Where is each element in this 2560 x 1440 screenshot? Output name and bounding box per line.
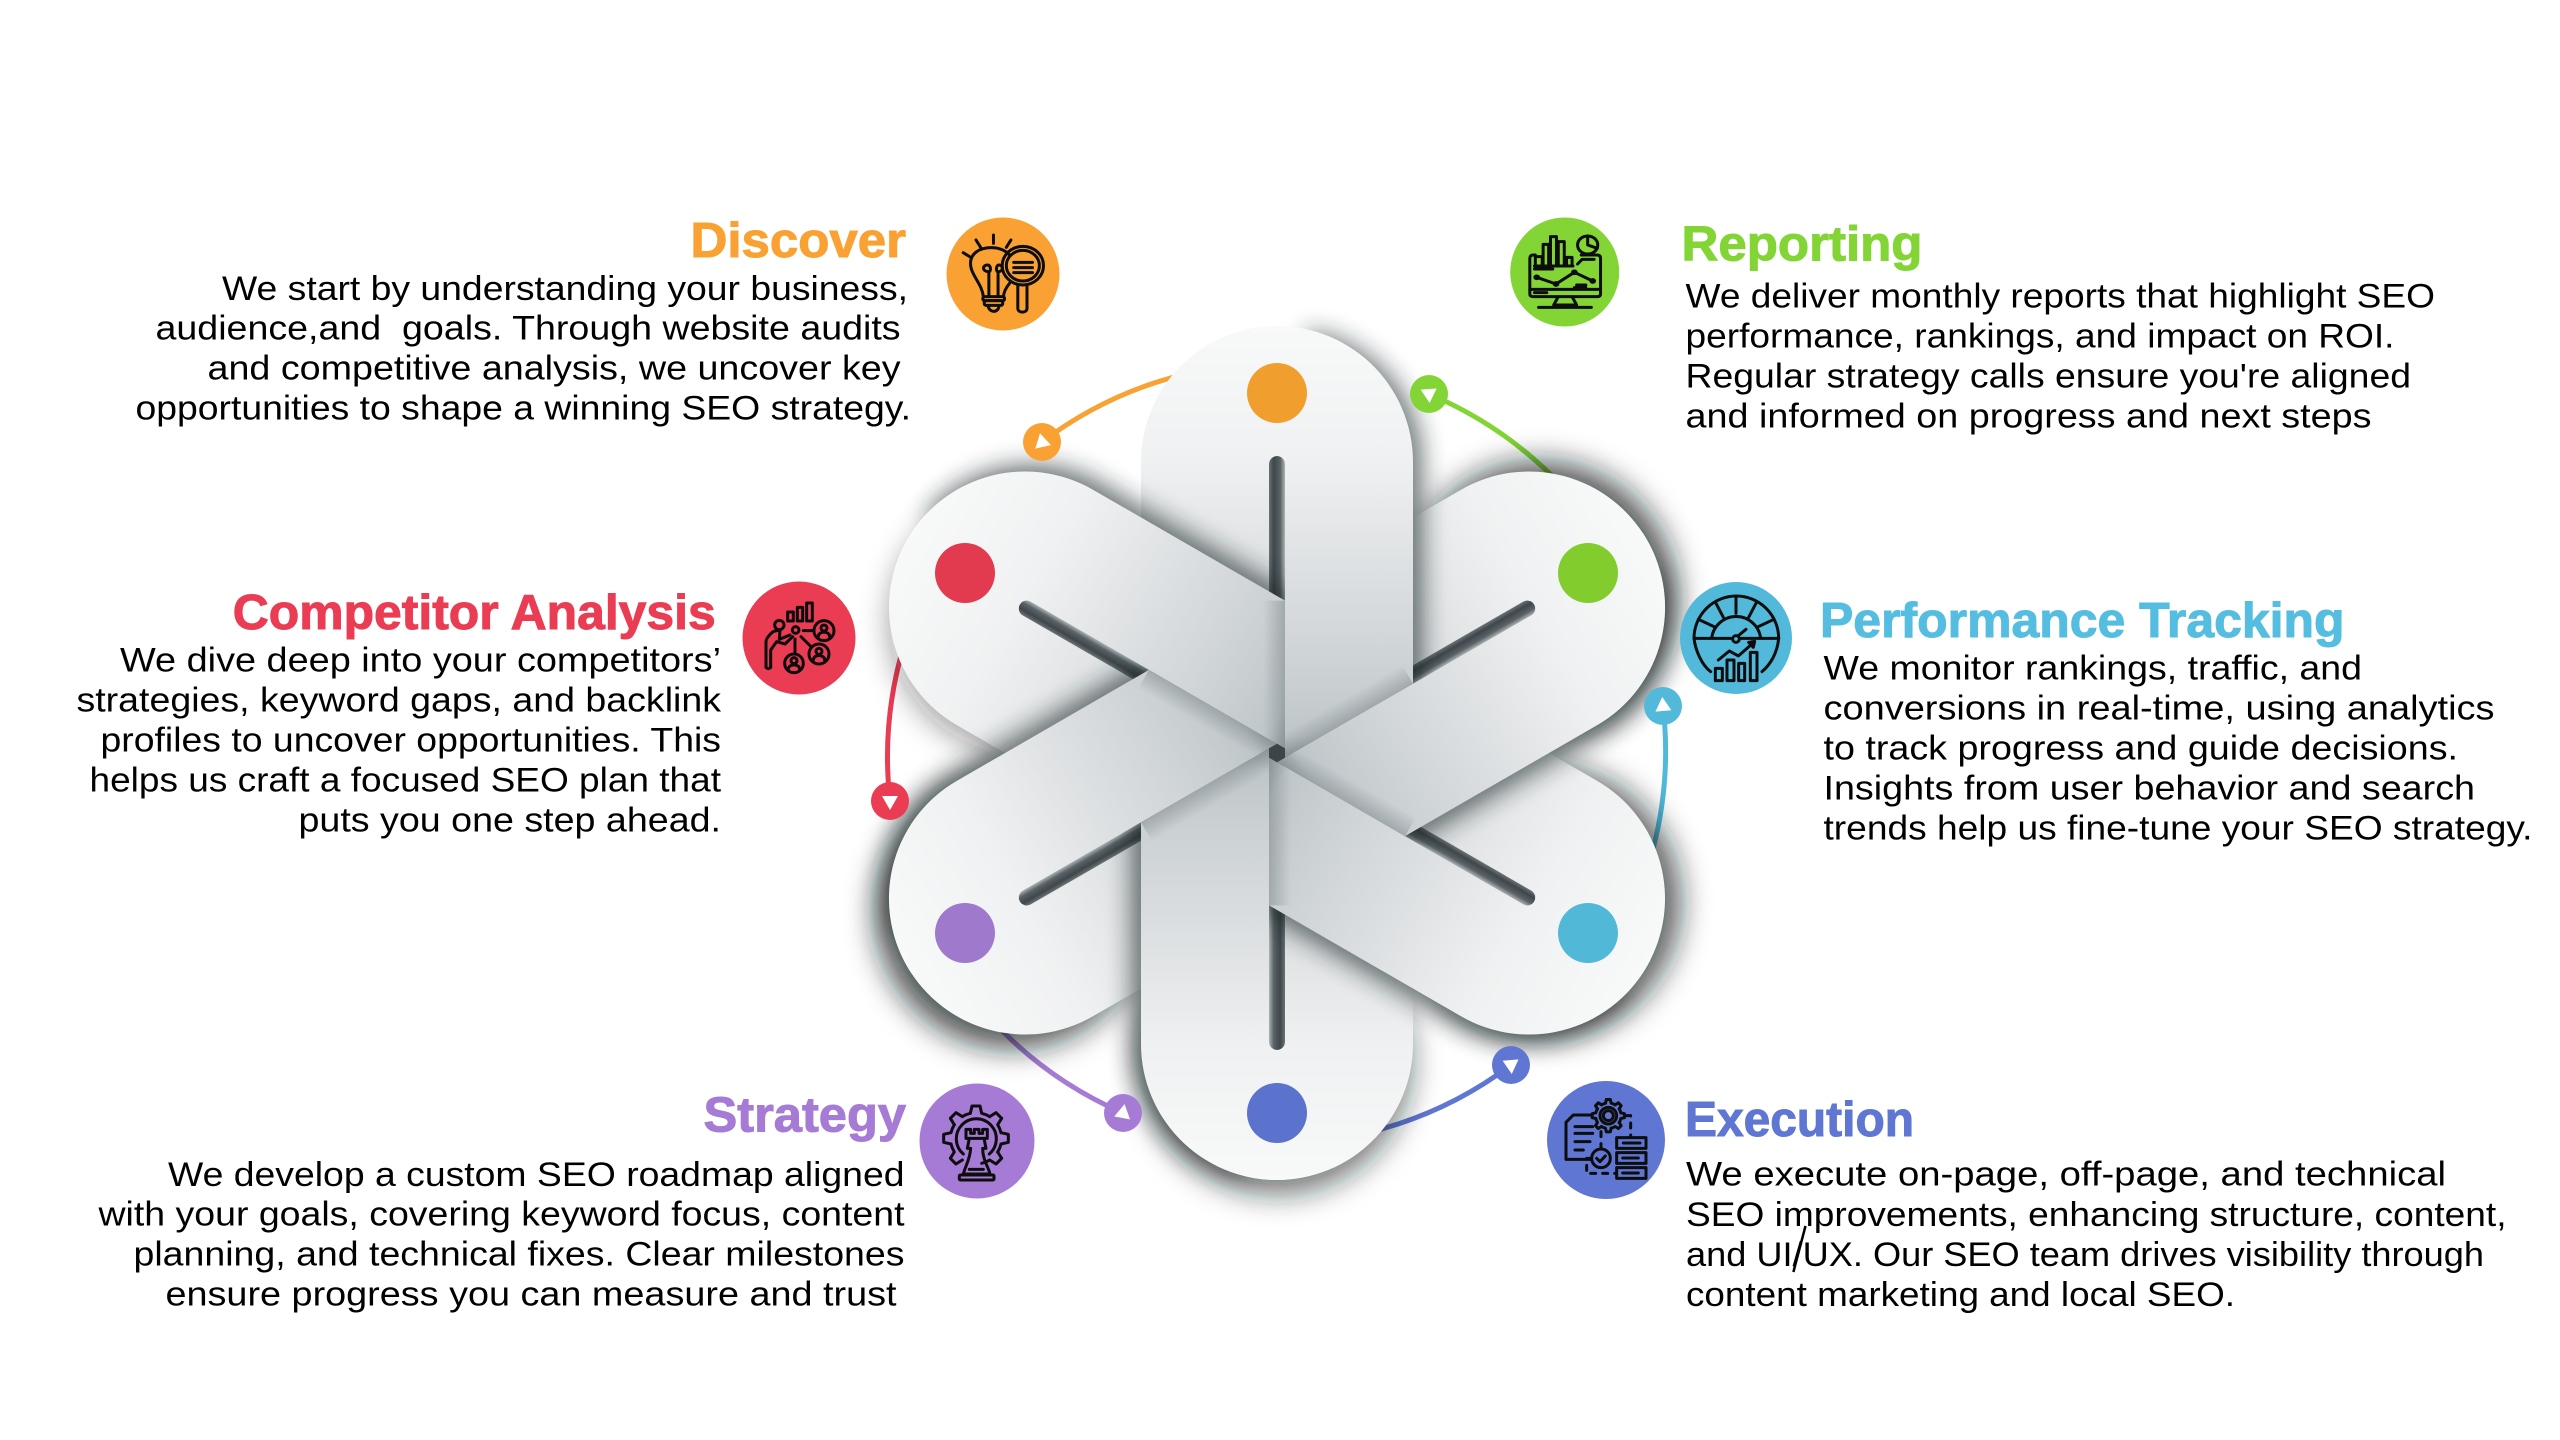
description: Competitor Analysis: We dive deep into your competitors’ (120, 642, 721, 680)
heading: Competitor Analysis: Competitor Analysis (233, 586, 716, 640)
description: Competitor Analysis (76, 642, 722, 840)
description: Performance Tracking (1824, 650, 2532, 848)
description: Performance Tracking: Insights from user behavior and search (1824, 770, 2475, 808)
description: Performance Tracking: to track progress and guide decisions. (1824, 730, 2458, 768)
heading: Execution: Execution (1685, 1093, 1914, 1147)
description: Performance Tracking: conversions in real-time, using analytics (1824, 690, 2494, 728)
description: Execution: content marketing and local SEO. (1686, 1276, 2235, 1314)
description: Competitor Analysis: profiles to uncover opportunities. This (100, 722, 721, 760)
description: Competitor Analysis: helps us craft a focused SEO plan that (90, 762, 722, 800)
icon: Strategy chess rook in gear (920, 1084, 1034, 1198)
description: Competitor Analysis: strategies, keyword gaps, and backlink (76, 682, 722, 720)
colored dots on ribbon arms (935, 363, 1618, 1143)
icon: Performance Tracking gauge (1680, 582, 1792, 694)
icon: Competitor Analysis people network (742, 582, 856, 694)
heading: Reporting: Reporting (1682, 218, 1922, 272)
description: Performance Tracking: We monitor rankings, traffic, and (1824, 650, 2362, 688)
description: Strategy: planning, and technical fixes. Clear milestones (134, 1236, 904, 1274)
central hexagonal woven ribbon diagram (838, 326, 1716, 1180)
panel: Execution (1685, 1093, 2506, 1314)
description: Discover: and competitive analysis, we uncover key (208, 350, 901, 388)
description: Execution: SEO improvements, enhancing structure, content, (1686, 1196, 2506, 1234)
description: Discover: We start by understanding your business, (222, 270, 908, 308)
description: Discover (136, 270, 911, 428)
description: Discover: audience,and goals. Through website audits (156, 310, 901, 348)
description: Strategy (97, 1156, 905, 1314)
icon: Reporting monitor with charts (1510, 218, 1619, 326)
description: Execution: We execute on-page, off-page, and technical (1686, 1156, 2446, 1194)
description: Competitor Analysis: puts you one step ahead. (298, 802, 721, 840)
description: Reporting: We deliver monthly reports that highlight SEO (1686, 278, 2435, 316)
connector nodes with arrows (871, 375, 1682, 1132)
panel: Performance Tracking (1820, 594, 2532, 848)
panel: Discover (136, 214, 911, 428)
panel: Competitor Analysis (76, 586, 722, 840)
description: Execution: and UI/UX. Our SEO team drives visibility through (1686, 1236, 2484, 1274)
description: Reporting: and informed on progress and next steps (1686, 398, 2372, 436)
heading: Discover: Discover (690, 214, 906, 268)
description: Strategy: with your goals, covering keyword focus, content (97, 1196, 905, 1234)
icon: Execution gear, document and stack (1547, 1081, 1665, 1199)
description: Reporting: performance, rankings, and impact on ROI. (1686, 318, 2394, 356)
panel: Strategy (97, 1089, 906, 1314)
heading: Strategy: Strategy (704, 1089, 906, 1143)
description: Strategy: We develop a custom SEO roadmap aligned (168, 1156, 904, 1194)
description: Strategy: ensure progress you can measure and trust (166, 1276, 897, 1314)
description: Reporting (1686, 278, 2435, 436)
outer lobe shadows (876, 462, 1680, 1194)
icon: Discover lightbulb and magnifier (946, 218, 1060, 330)
heading: Performance Tracking: Performance Tracking (1820, 594, 2344, 648)
panel: Reporting (1682, 218, 2435, 436)
description: Reporting: Regular strategy calls ensure you're aligned (1686, 358, 2411, 396)
description: Discover: opportunities to shape a winning SEO strategy. (136, 390, 911, 428)
connector arcs (888, 373, 1666, 1132)
description: Performance Tracking: trends help us fine-tune your SEO strategy. (1824, 810, 2532, 848)
description: Execution (1686, 1156, 2506, 1314)
